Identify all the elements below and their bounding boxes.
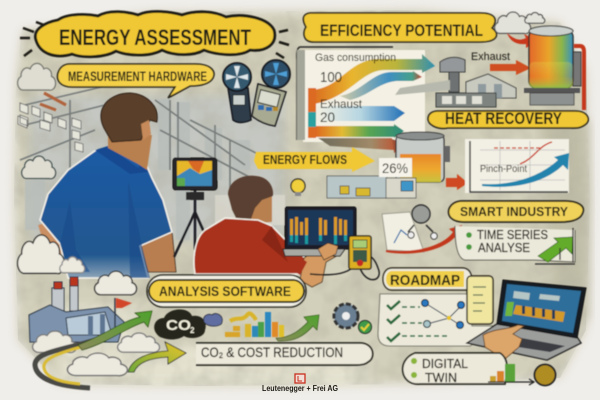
small blue cloud <box>204 314 222 326</box>
company logo mark <box>295 374 305 383</box>
company name: Leutenegger + Frei AG <box>262 384 338 393</box>
arm <box>300 244 340 287</box>
hair <box>101 93 157 142</box>
title banner: ENERGY ASSESSMENT <box>59 25 251 50</box>
neck <box>108 135 152 170</box>
ear <box>141 120 151 140</box>
road swoosh <box>35 335 110 388</box>
machines row <box>327 176 416 198</box>
tablet on tripod <box>173 158 217 257</box>
arrow: exhaust into recovery <box>490 60 531 75</box>
neck and face <box>238 190 272 224</box>
arrow: yellow swoosh <box>128 342 186 372</box>
pinch-point chart <box>465 139 569 193</box>
panel: time series analysis: ANALYSE <box>478 240 530 255</box>
label: exhaust upper: Exhaust <box>471 51 510 63</box>
icon: gear with check <box>334 304 372 334</box>
laptop with analysis charts <box>283 207 356 260</box>
icon: coin <box>534 364 556 386</box>
sankey band waste arrow <box>318 138 407 153</box>
label: exhaust: Exhaust <box>320 97 363 111</box>
panel: efficiency flow diagram <box>297 47 435 153</box>
shirt folds <box>60 180 150 278</box>
value 20: 20 <box>320 109 335 125</box>
smoke cloud <box>495 12 545 34</box>
label: gas consumption: Gas consumption <box>315 52 396 64</box>
smokestack factory <box>29 277 132 342</box>
heat exchanger tower <box>524 26 584 110</box>
analysis software banner: ANALYSIS SOFTWARE <box>159 283 291 299</box>
blue shirt <box>40 150 172 278</box>
measurement hardware speech bubble: MEASUREMENT HARDWARE <box>68 69 207 84</box>
technician in red shirt <box>194 176 340 287</box>
card: data gauge sketch <box>382 205 437 252</box>
heat recovery banner: HEAT RECOVERY <box>445 110 562 128</box>
energy flows banner <box>254 147 375 172</box>
icon: CO2 cloud: 2 <box>190 326 195 335</box>
value 26 percent: 26% <box>382 160 408 176</box>
mini bars <box>490 376 496 382</box>
machinery and building <box>395 57 516 107</box>
title banner <box>20 12 289 58</box>
icon: CO2 cloud: CO <box>166 317 191 334</box>
arrow: green rising <box>78 311 152 350</box>
sankey band exhaust blue <box>308 112 316 127</box>
roadmap banner: ROADMAP <box>390 272 460 289</box>
value 100: 100 <box>320 69 342 86</box>
measurement hardware speech bubble <box>58 64 214 98</box>
panel: digital twin: DIGITAL <box>422 356 468 371</box>
left source block <box>308 88 316 138</box>
yellow squiggle <box>230 313 256 321</box>
efficiency potential banner <box>303 13 496 42</box>
sankey band top <box>308 54 435 105</box>
panel: time series analysis: TIME SERIES <box>477 227 548 242</box>
arrow: tank output <box>446 174 468 190</box>
cost reduction banner: CO₂ & COST REDUCTION <box>201 344 343 360</box>
multimeter <box>310 236 379 280</box>
efficiency potential banner: EFFICIENCY POTENTIAL <box>320 21 483 40</box>
analysis software banner <box>147 275 306 307</box>
bar chart <box>225 312 284 337</box>
smart industry banner <box>449 201 583 222</box>
icon: check marks <box>387 301 400 341</box>
sankey band second <box>340 71 422 100</box>
roadmap banner <box>383 268 472 290</box>
icon: CO2 cloud <box>154 309 206 340</box>
red shirt <box>194 218 310 274</box>
panel: digital twin <box>403 353 556 386</box>
clouds lower left <box>18 235 160 376</box>
factory hall background <box>18 85 285 240</box>
panel: time series analysis <box>455 226 575 264</box>
clouds upper left <box>18 63 56 179</box>
clipboard <box>467 276 493 324</box>
icon: green trend arrow <box>538 237 573 262</box>
smart industry banner: SMART INDUSTRY <box>460 204 568 219</box>
technician in blue shirt <box>38 93 176 278</box>
icon: light bulb <box>291 179 305 196</box>
left arm <box>38 218 62 262</box>
sankey band lower <box>316 124 404 138</box>
right arm <box>140 232 176 272</box>
arrow: green chart trend <box>276 315 319 341</box>
arrow: red growth <box>386 225 462 254</box>
panel: digital twin: TWIN <box>425 370 457 385</box>
pinch-point chart: Pinch-Point <box>480 164 527 175</box>
icon: anemometers <box>223 60 290 126</box>
hair <box>228 176 273 222</box>
laptop with digital twin <box>467 280 586 360</box>
arrow: red into exchanger <box>507 33 537 48</box>
cost reduction banner <box>196 343 373 365</box>
tank with heat fill <box>396 132 450 182</box>
energy flows banner: ENERGY FLOWS <box>263 153 347 167</box>
panel: roadmap checklist <box>378 294 500 346</box>
